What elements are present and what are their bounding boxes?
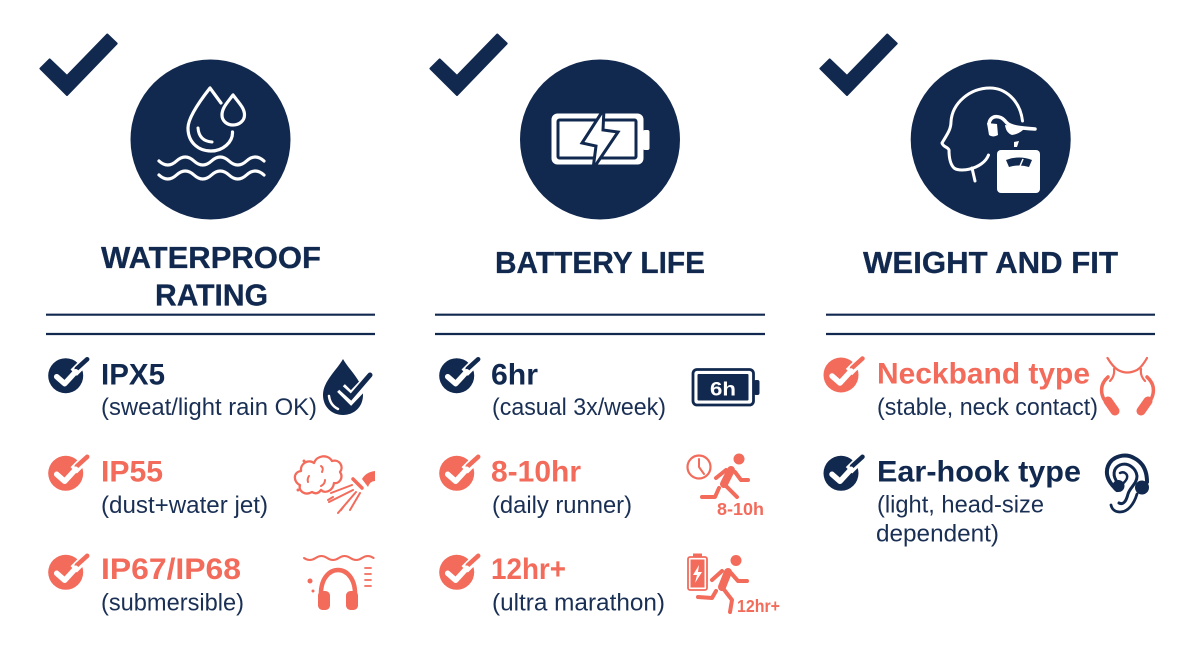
- panel: battery life: [430, 34, 780, 617]
- icon: coral check badge: [824, 357, 864, 392]
- description: 8-10hr: (daily runner): [492, 492, 632, 519]
- label: neckband type: Neckband type: [877, 358, 1090, 390]
- description: 12hr+: (ultra marathon): [492, 590, 665, 617]
- item: IP55: [48, 455, 375, 519]
- icon: drop with check: [323, 359, 370, 415]
- icon: 6h battery: [693, 370, 760, 405]
- icon: large check mark: [820, 34, 897, 95]
- heading: weight and fit: WEIGHT AND FIT: [863, 245, 1118, 280]
- label: IPX5: IPX5: [101, 358, 165, 391]
- icon: clock and runner: 8-10h: [717, 499, 764, 519]
- icon: 6h battery: 6h: [710, 380, 736, 400]
- icon: navy check badge: [824, 455, 864, 491]
- icon: coral check badge: [439, 455, 480, 491]
- icon: head, headset and scale: [911, 60, 1071, 220]
- item: 8-10hr: [439, 454, 764, 519]
- item: 6hr: [439, 358, 760, 421]
- icon: dust cloud and water jet: [295, 456, 375, 513]
- description: neckband type: (stable, neck contact): [877, 394, 1098, 421]
- item: IPX5: [48, 358, 370, 421]
- item: ear-hook type: [824, 455, 1149, 548]
- label: 12hr+: 12hr+: [491, 553, 566, 586]
- icon: navy check badge: [439, 358, 480, 393]
- description: ear-hook type: dependent): [876, 521, 999, 548]
- icon: ear with hook earphone: [1107, 456, 1149, 512]
- icon: coral check badge: [48, 455, 89, 491]
- description: ear-hook type: (light, head-size: [877, 492, 1044, 519]
- icon: navy check badge: [48, 358, 89, 393]
- heading: waterproof rating: WATERPROOF: [101, 240, 321, 275]
- icon: water drops and waves: [130, 60, 290, 220]
- icon: headphones under water: [304, 556, 374, 610]
- icon: large check mark: [40, 34, 117, 95]
- label: ear-hook type: Ear-hook type: [877, 456, 1081, 489]
- item: IP67/IP68: [48, 553, 374, 617]
- panel: waterproof rating: [40, 34, 375, 617]
- label: IP67/IP68: IP67/IP68: [101, 553, 241, 586]
- label: 8-10hr: 8-10hr: [491, 456, 581, 489]
- description: IPX5: (sweat/light rain OK): [101, 394, 317, 421]
- icon: battery and runner: [688, 554, 780, 616]
- icon: large check mark: [430, 34, 507, 95]
- description: ear-hook type: [876, 492, 1044, 548]
- description: IP55: (dust+water jet): [101, 492, 268, 519]
- icon: battery and runner: 12hr+: [737, 596, 780, 616]
- label: 6hr: 6hr: [491, 358, 538, 391]
- heading: battery life: BATTERY LIFE: [495, 245, 705, 280]
- item: neckband type: [824, 357, 1153, 421]
- heading: waterproof rating: [101, 240, 321, 312]
- icon: coral check badge: [439, 554, 480, 590]
- description: 6hr: (casual 3x/week): [492, 394, 666, 421]
- item: 12hr+: [439, 553, 780, 617]
- icon: charging battery: [520, 60, 680, 220]
- icon: neckband headphones: [1102, 358, 1153, 411]
- panel: weight and fit: [820, 34, 1155, 548]
- label: IP55: IP55: [101, 456, 163, 489]
- icon: clock and runner: [688, 454, 764, 519]
- icon: coral check badge: [48, 554, 89, 590]
- description: IP67/IP68: (submersible): [101, 590, 244, 617]
- heading: waterproof rating: RATING: [155, 278, 268, 312]
